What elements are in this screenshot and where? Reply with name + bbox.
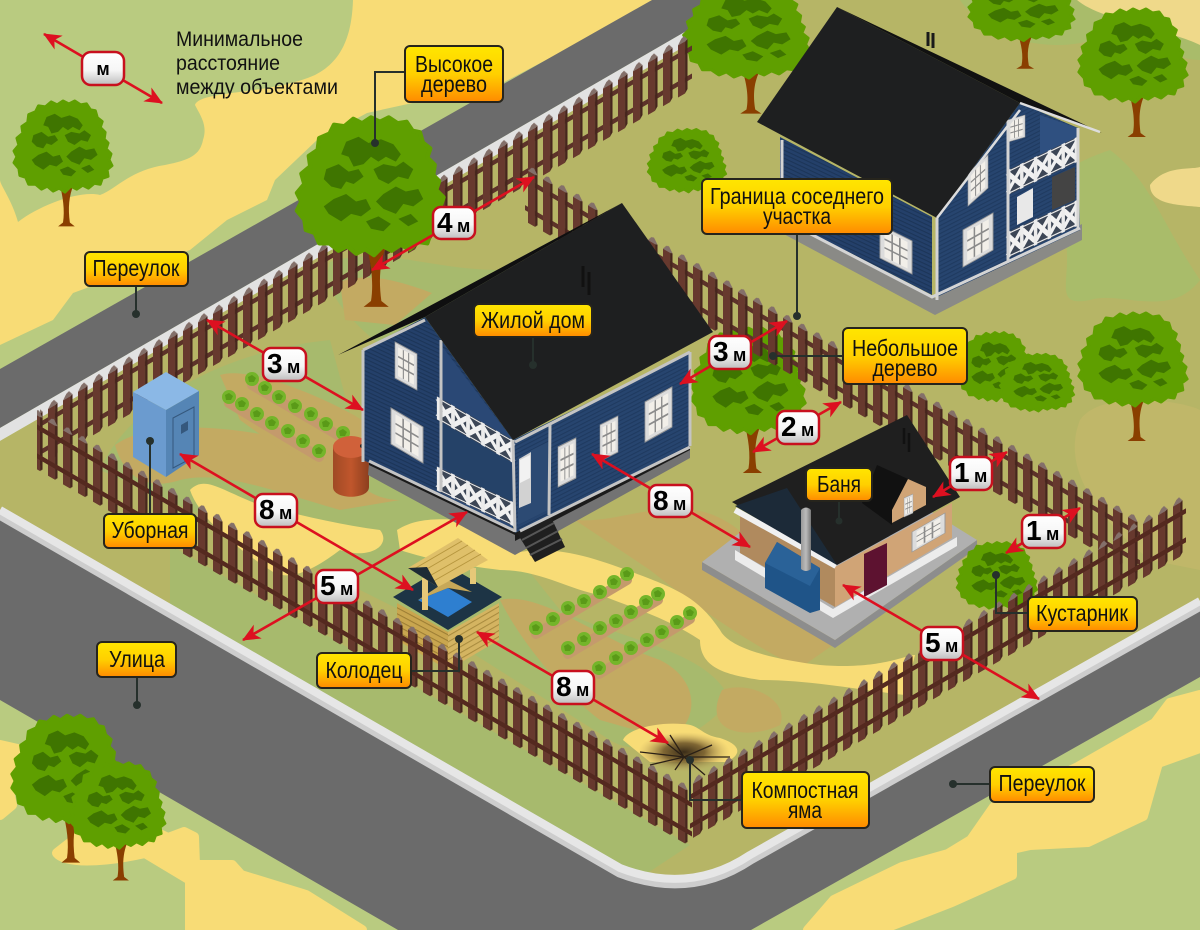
gable wall	[363, 317, 513, 530]
gable windows	[963, 213, 993, 267]
distance arrow: 1 m shrub	[1006, 508, 1080, 553]
legend: arrow and text: расстояние	[176, 52, 280, 75]
distance arrow: 2 m: м	[801, 420, 814, 440]
road: street and lane at the front	[0, 510, 1200, 930]
label: bath house	[806, 468, 872, 524]
distance arrow: 3 m to fence: 3	[267, 348, 283, 379]
label: well	[317, 635, 463, 688]
label: dwelling house: Жилой дом	[481, 307, 585, 333]
label: side lane top	[85, 252, 188, 318]
garden bed rows by the house	[222, 372, 350, 458]
gable windows	[395, 342, 417, 390]
shrub	[957, 542, 1037, 609]
distance arrow: 2 m: 2	[781, 411, 797, 442]
label: small tree	[769, 328, 967, 384]
tree: top right small	[969, 0, 1074, 69]
side windows	[558, 438, 576, 487]
posts	[422, 578, 428, 610]
roof	[757, 7, 1020, 218]
label: small tree: Небольшое	[852, 335, 958, 361]
bath house	[702, 415, 977, 648]
side wall	[513, 352, 690, 533]
distance arrow: 8 m outhouse to well	[180, 454, 413, 590]
label: shrub: Кустарник	[1036, 600, 1129, 626]
distance arrow: 1 m shrub: 1	[1026, 515, 1042, 546]
foundation	[368, 448, 690, 555]
label: outhouse	[104, 437, 196, 548]
garden bed rows by the well	[529, 567, 697, 675]
balconies	[438, 397, 513, 463]
stove block	[765, 542, 820, 613]
distance arrow: 4 m	[372, 177, 534, 270]
roof	[338, 203, 622, 355]
distance arrow: 1 m shrub: м	[1046, 524, 1059, 544]
fence: neighbour boundary	[525, 161, 1140, 578]
bushes right	[958, 332, 1074, 412]
balconies	[1008, 137, 1077, 195]
porch	[518, 442, 548, 525]
label: neighbour boundary: участка	[763, 203, 831, 229]
bottom-left trees	[12, 715, 165, 881]
distance arrow: 4 m: м	[457, 216, 470, 236]
distance arrow: 8 m well to compost: 8	[556, 671, 572, 702]
distance arrow: 8 m well to compost	[477, 632, 668, 743]
steps	[517, 515, 565, 562]
tree: right	[1079, 313, 1187, 441]
label: tall tree: Высокое	[415, 51, 493, 77]
road: upper lane	[0, 0, 765, 441]
compost pit	[638, 732, 730, 775]
main house	[338, 203, 713, 562]
label: neighbour boundary: Граница соседнего	[710, 183, 884, 209]
well	[393, 538, 502, 670]
distance arrow: 8 m outhouse to well: м	[279, 503, 292, 523]
label: well: Колодец	[326, 657, 402, 683]
distance arrow: 3 m to neighbour: 3	[713, 336, 729, 367]
dark frame and water	[393, 565, 502, 630]
fence: lane side	[690, 492, 1186, 842]
vents	[904, 428, 909, 452]
distance arrow: 8 m house to bath: м	[673, 494, 686, 514]
ground floor door and opening	[1017, 188, 1033, 225]
distance arrow: 3 m to fence	[207, 320, 363, 410]
legend: arrow and text: между объектами	[176, 76, 338, 99]
label: compost pit: яма	[788, 797, 822, 823]
distance arrow: 8 m house to bath: 8	[653, 485, 669, 516]
windows	[912, 513, 945, 552]
barrel	[333, 436, 369, 497]
white trim	[363, 320, 690, 532]
tree: top right	[1079, 9, 1187, 137]
distance arrow: 3 m to neighbour	[680, 321, 787, 384]
foundation	[780, 217, 1082, 315]
distance arrow: 5 m house to street: 5	[320, 570, 336, 601]
label: side lane bottom	[949, 767, 1094, 802]
fence: street side	[37, 407, 692, 850]
outhouse door	[173, 407, 194, 468]
distance arrow: 5 m bath to lane: м	[945, 636, 958, 656]
distance arrow: 5 m bath to lane	[843, 585, 1039, 699]
legend: arrow and text	[44, 28, 338, 103]
label: tall tree	[371, 46, 503, 147]
bush behind neighbour plot	[648, 129, 726, 192]
roof	[732, 415, 960, 565]
distance arrow: 1 m bath	[933, 452, 1007, 497]
legend: arrow and text: м	[96, 59, 110, 79]
distance arrow: 1 m bath: 1	[954, 457, 970, 488]
door	[864, 543, 887, 597]
distance arrow: 3 m to fence: м	[287, 357, 300, 377]
gable wall	[937, 103, 1080, 297]
label: compost pit	[686, 756, 869, 828]
label: outhouse: Уборная	[112, 517, 188, 543]
distance arrow: 5 m house to street	[243, 512, 467, 640]
wooden roof	[408, 538, 488, 587]
concrete slab	[702, 540, 977, 648]
distance arrow: 3 m to neighbour: м	[733, 345, 746, 365]
walls	[740, 513, 835, 607]
long wall	[780, 137, 932, 295]
vents	[928, 32, 933, 48]
label: tall tree: дерево	[421, 71, 487, 97]
distance arrow: 5 m bath to lane: 5	[925, 627, 941, 658]
distance arrow: 4 m: 4	[437, 207, 453, 238]
plinth	[735, 537, 957, 618]
distance arrow: 1 m bath: м	[974, 466, 987, 486]
label: bath house: Баня	[817, 471, 861, 497]
distance arrow: 5 m house to street: м	[340, 579, 353, 599]
tall tree	[297, 117, 445, 307]
tree: top middle	[684, 0, 809, 114]
label: side lane top: Переулок	[92, 255, 180, 281]
distance arrow: 8 m house to bath	[592, 454, 750, 547]
eave	[735, 510, 836, 566]
tree: far left	[14, 101, 112, 226]
label: dwelling house	[474, 304, 592, 369]
fence: back lane side	[40, 30, 692, 468]
neighbour house	[757, 7, 1102, 315]
balcony recess	[441, 345, 513, 530]
window long wall	[880, 225, 912, 274]
label: street	[97, 642, 176, 709]
small tree	[692, 328, 805, 473]
label: compost pit: Компостная	[752, 777, 858, 803]
vents	[583, 266, 589, 295]
label: small tree: дерево	[872, 355, 938, 381]
label: neighbour boundary	[702, 179, 892, 320]
legend: arrow and text: Минимальное	[176, 28, 303, 51]
label: side lane bottom: Переулок	[998, 770, 1086, 796]
distance arrow: 8 m well to compost: м	[576, 680, 589, 700]
label: shrub	[992, 571, 1137, 631]
chimney	[801, 508, 811, 571]
dormer	[862, 465, 908, 525]
log walls	[397, 603, 448, 670]
label: street: Улица	[109, 646, 165, 672]
outhouse	[133, 372, 199, 477]
distance arrow: 8 m outhouse to well: 8	[259, 494, 275, 525]
distance arrow: 2 m	[753, 402, 841, 452]
